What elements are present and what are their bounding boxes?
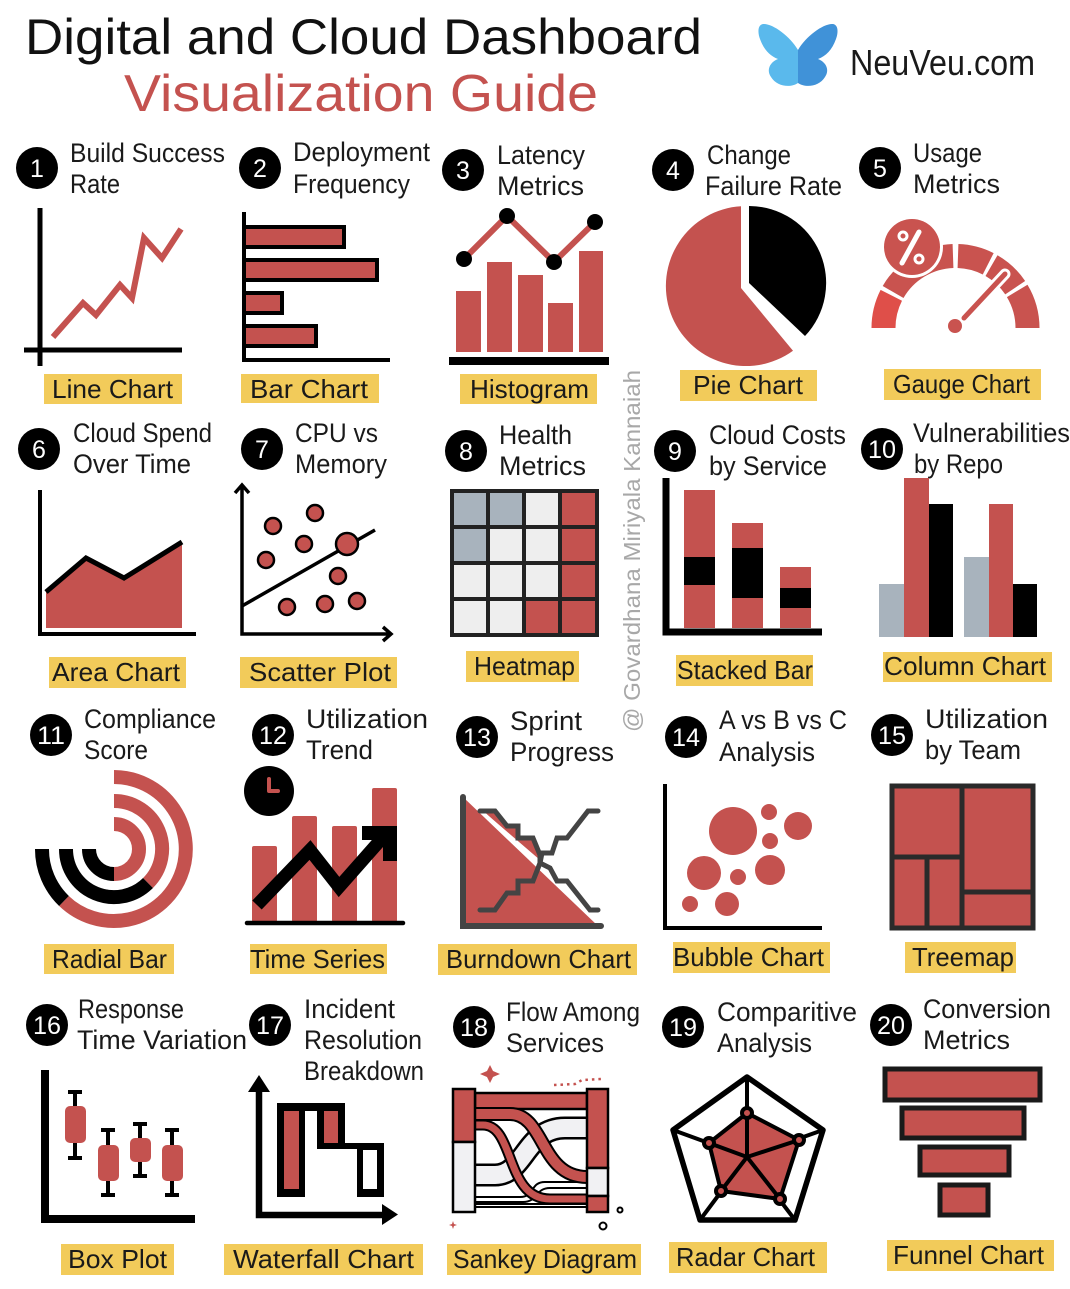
panel 5: gauge chart bbox=[859, 138, 1041, 400]
panel 1: line chart: Rate bbox=[70, 169, 120, 199]
panel 3: histogram: Metrics bbox=[497, 171, 584, 201]
panel 19: radar chart: 19 bbox=[669, 1014, 697, 1042]
title bbox=[25, 9, 702, 123]
panel 15: treemap: Treemap bbox=[912, 942, 1014, 972]
panel 11: radial bar bbox=[30, 704, 216, 974]
panel 20: funnel chart: 20 bbox=[877, 1012, 905, 1040]
panel 13: burndown chart bbox=[438, 706, 637, 975]
title: Visualization Guide bbox=[124, 65, 598, 123]
panel 10: column chart: Column Chart bbox=[884, 651, 1047, 681]
panel 1: line chart: 1 bbox=[30, 155, 44, 183]
panel 8: heatmap: Heatmap bbox=[474, 651, 575, 681]
panel 6: area chart: Area Chart bbox=[52, 657, 181, 687]
panel 7: scatter plot: Memory bbox=[295, 449, 387, 479]
panel 16: box plot: Time Variation bbox=[77, 1025, 247, 1055]
panel 18: sankey diagram bbox=[447, 997, 641, 1275]
panel 19: radar chart: Radar Chart bbox=[676, 1242, 816, 1272]
panel 7: scatter plot bbox=[235, 418, 397, 688]
panel 17: waterfall chart: Waterfall Chart bbox=[233, 1244, 415, 1274]
panel 20: funnel chart: Funnel Chart bbox=[893, 1240, 1045, 1270]
panel 3: histogram: Histogram bbox=[470, 374, 589, 404]
panel 16: box plot: 16 bbox=[33, 1012, 61, 1040]
panel 6: area chart bbox=[18, 418, 212, 688]
panel 10: column chart: 10 bbox=[868, 436, 896, 464]
panel 14: bubble chart: 14 bbox=[672, 724, 700, 752]
panel 10: column chart: by Repo bbox=[914, 449, 1003, 479]
panel 17: waterfall chart: 17 bbox=[256, 1012, 284, 1040]
panel 11: radial bar: 11 bbox=[37, 722, 65, 750]
panel 6: area chart: 6 bbox=[32, 436, 46, 464]
panel 17: waterfall chart: Resolution bbox=[304, 1025, 422, 1055]
panel 6: area chart: Over Time bbox=[73, 449, 191, 479]
panel 13: burndown chart: Progress bbox=[510, 737, 614, 767]
panel 8: heatmap: Health bbox=[499, 420, 572, 450]
panel 12: time series: 12 bbox=[259, 722, 287, 750]
panel 9: stacked bar: Cloud Costs bbox=[709, 420, 846, 450]
panel 19: radar chart: Analysis bbox=[717, 1028, 812, 1058]
panel 4: pie chart: Failure Rate bbox=[705, 171, 842, 201]
panel 10: column chart bbox=[861, 418, 1070, 682]
panel 15: treemap bbox=[871, 704, 1048, 973]
panel 4: pie chart: Change bbox=[707, 140, 791, 170]
panel 14: bubble chart: Analysis bbox=[719, 737, 815, 767]
panel 1: line chart: Build Success bbox=[70, 138, 225, 168]
panel 16: box plot bbox=[26, 994, 247, 1275]
panel 19: radar chart bbox=[662, 997, 857, 1273]
panel 14: bubble chart: Bubble Chart bbox=[673, 942, 825, 972]
panel 14: bubble chart bbox=[665, 705, 847, 973]
panel 11: radial bar: Score bbox=[84, 735, 148, 765]
panel 15: treemap: by Team bbox=[925, 735, 1021, 765]
panel 1: line chart bbox=[16, 138, 225, 404]
watermark: @ Govardhana Miriyala Kannaiah bbox=[619, 370, 645, 732]
panel 18: sankey diagram: 18 bbox=[460, 1014, 488, 1042]
panel 8: heatmap: 8 bbox=[459, 438, 473, 466]
panel 4: pie chart bbox=[652, 140, 842, 401]
panel 4: pie chart: Pie Chart bbox=[693, 370, 804, 400]
panel 2: bar chart bbox=[239, 137, 430, 404]
panel 13: burndown chart: Sprint bbox=[510, 706, 582, 736]
panel 7: scatter plot: 7 bbox=[255, 436, 269, 464]
panel 17: waterfall chart: Incident bbox=[304, 994, 395, 1024]
panel 2: bar chart: Bar Chart bbox=[250, 374, 369, 404]
panel 18: sankey diagram: Sankey Diagram bbox=[453, 1244, 637, 1274]
panel 12: time series: Trend bbox=[306, 735, 373, 765]
panel 13: burndown chart: 13 bbox=[463, 724, 491, 752]
panel 12: time series: Time Series bbox=[250, 944, 385, 974]
panel 5: gauge chart: Metrics bbox=[913, 169, 1000, 199]
panel 14: bubble chart: A vs B vs C bbox=[719, 705, 847, 735]
panel 16: box plot: Box Plot bbox=[68, 1244, 168, 1274]
panel 20: funnel chart: Metrics bbox=[923, 1025, 1010, 1055]
panel 8: heatmap: Metrics bbox=[499, 451, 586, 481]
panel 7: scatter plot: Scatter Plot bbox=[249, 657, 392, 687]
panel 4: pie chart: 4 bbox=[666, 157, 680, 185]
title: Digital and Cloud Dashboard bbox=[25, 9, 702, 65]
logo: NeuVeu butterfly bbox=[758, 24, 1035, 86]
panel 17: waterfall chart bbox=[224, 994, 424, 1275]
panel 12: time series bbox=[244, 704, 428, 974]
panel 3: histogram: Latency bbox=[497, 140, 585, 170]
panel 16: box plot: Response bbox=[78, 994, 184, 1024]
panel 9: stacked bar bbox=[654, 420, 846, 686]
panel 5: gauge chart: 5 bbox=[873, 155, 887, 183]
panel 15: treemap: Utilization bbox=[925, 704, 1048, 734]
panel 12: time series: Utilization bbox=[306, 704, 428, 734]
panel 1: line chart: Line Chart bbox=[52, 374, 174, 404]
panel 17: waterfall chart: Breakdown bbox=[304, 1056, 424, 1086]
panel 2: bar chart: Deployment bbox=[293, 137, 430, 167]
panel 18: sankey diagram: Flow Among bbox=[506, 997, 640, 1027]
panel 7: scatter plot: CPU vs bbox=[295, 418, 378, 448]
logo: NeuVeu butterfly: NeuVeu.com bbox=[850, 42, 1035, 83]
panel 13: burndown chart: Burndown Chart bbox=[446, 944, 632, 974]
panel 5: gauge chart: Gauge Chart bbox=[893, 369, 1031, 399]
panel 20: funnel chart bbox=[870, 994, 1054, 1271]
panel 3: histogram bbox=[442, 140, 609, 404]
panel 18: sankey diagram: Services bbox=[506, 1028, 604, 1058]
panel 11: radial bar: Compliance bbox=[84, 704, 216, 734]
panel 8: heatmap bbox=[445, 420, 597, 682]
panel 2: bar chart: 2 bbox=[253, 155, 267, 183]
panel 9: stacked bar: Stacked Bar bbox=[677, 655, 813, 685]
panel 19: radar chart: Comparitive bbox=[717, 997, 857, 1027]
panel 3: histogram: 3 bbox=[456, 157, 470, 185]
panel 20: funnel chart: Conversion bbox=[923, 994, 1051, 1024]
panel 11: radial bar: Radial Bar bbox=[52, 944, 167, 974]
panel 6: area chart: Cloud Spend bbox=[73, 418, 212, 448]
panel 15: treemap: 15 bbox=[878, 722, 906, 750]
panel 2: bar chart: Frequency bbox=[293, 169, 410, 199]
panel 9: stacked bar: by Service bbox=[709, 451, 827, 481]
panel 5: gauge chart: Usage bbox=[913, 138, 982, 168]
panel 9: stacked bar: 9 bbox=[668, 438, 682, 466]
